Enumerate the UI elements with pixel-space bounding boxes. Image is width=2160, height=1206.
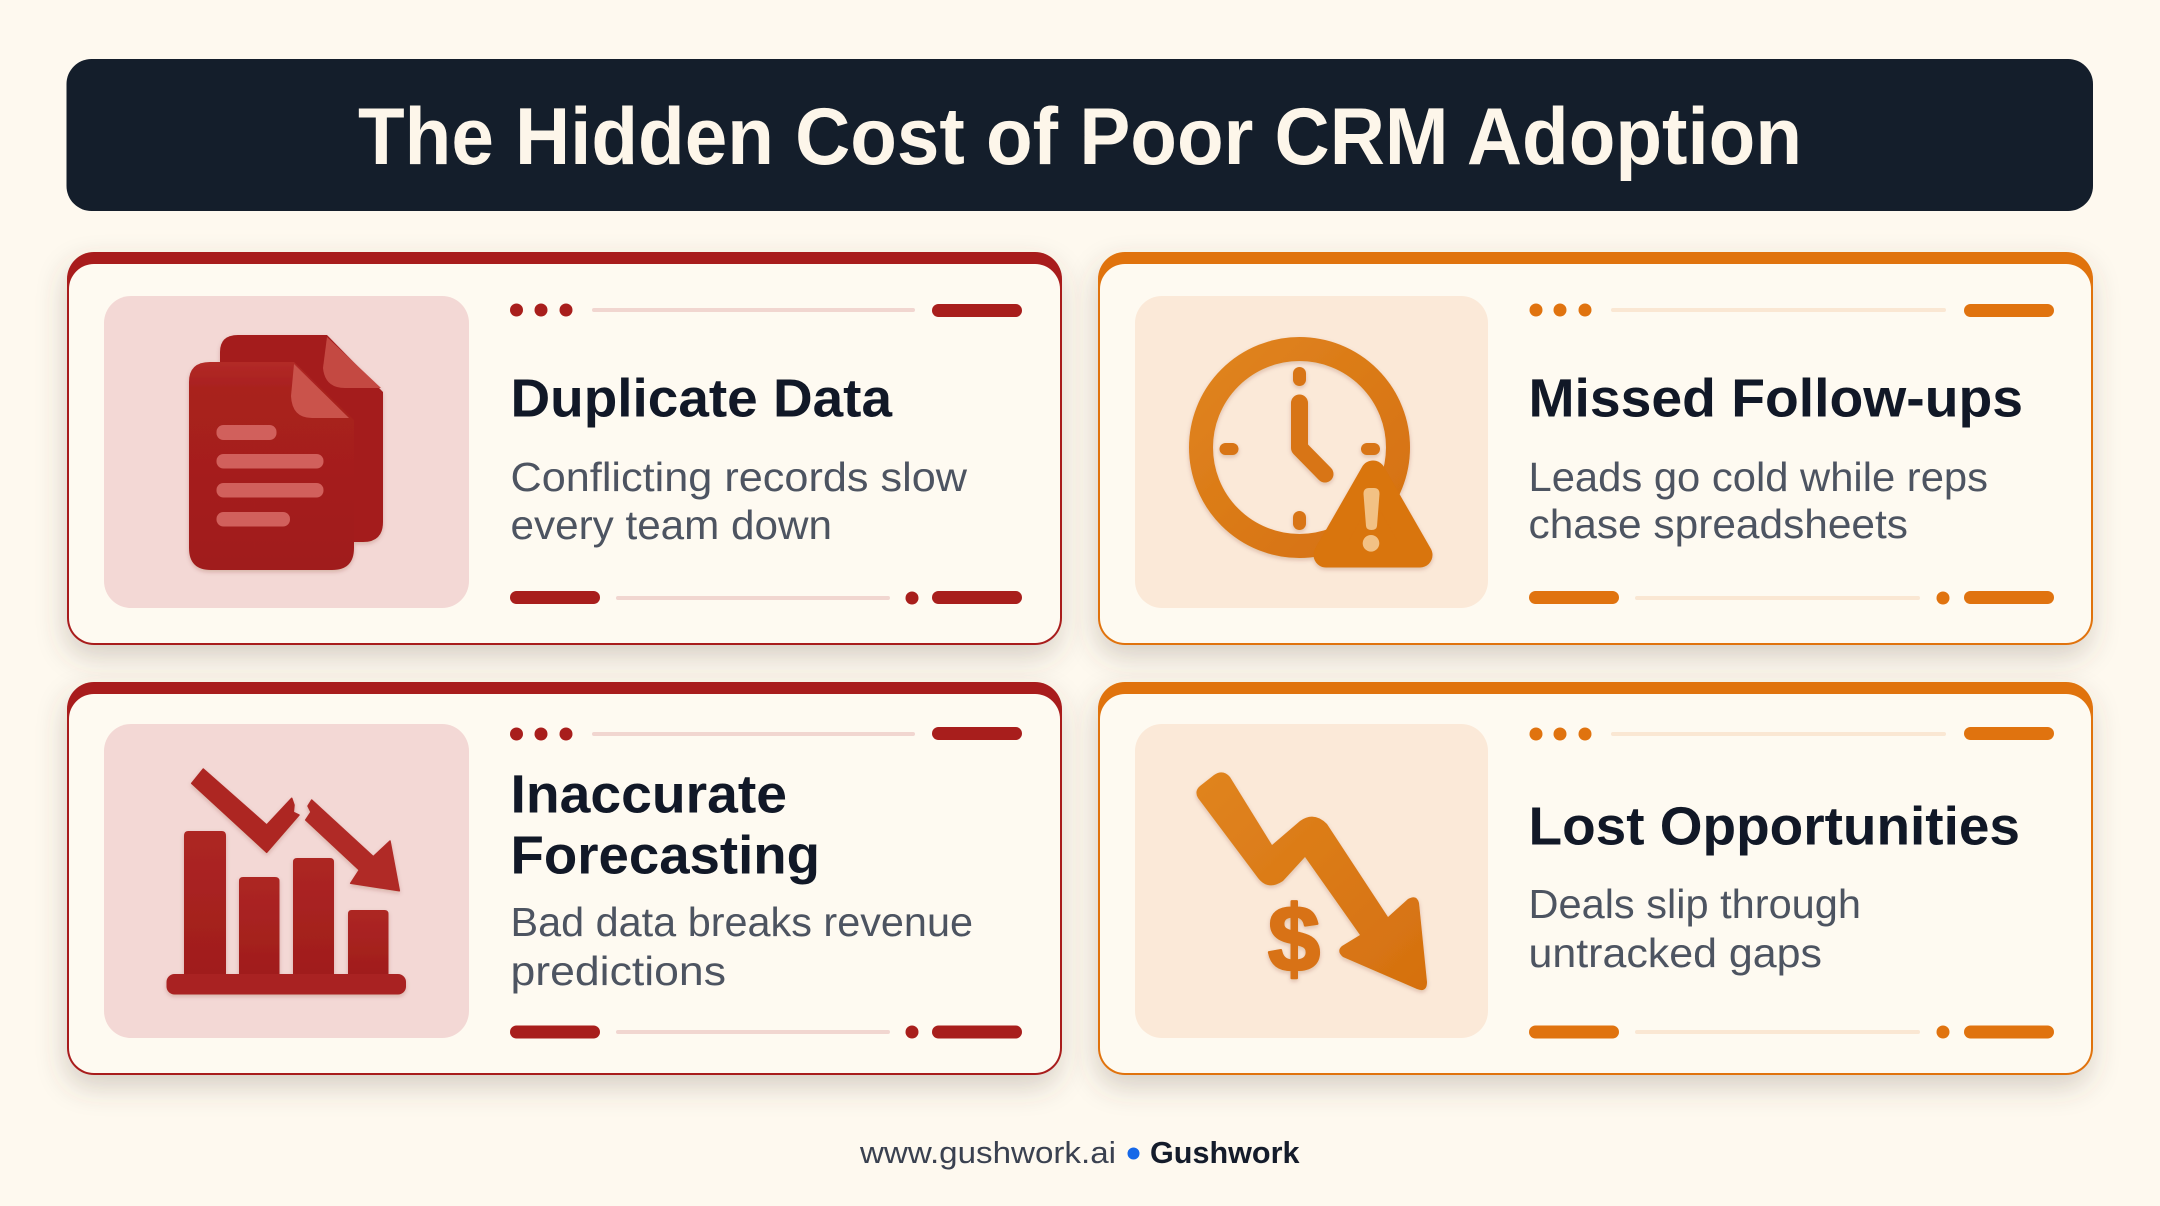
icon: duplicate documents: [189, 335, 383, 570]
heading: Inaccurate: [510, 764, 787, 824]
top ornament: [510, 304, 1022, 317]
description: Conflicting records slow: [510, 454, 967, 500]
icon: falling arrow with dollar: [1196, 772, 1427, 991]
icon: clock with warning: [1201, 349, 1420, 555]
description: every team down: [510, 502, 832, 548]
bottom ornament: [510, 1026, 1022, 1038]
icon tile: [104, 296, 469, 608]
panel: missed follow-ups: [1098, 252, 2093, 645]
icon tile: [1135, 724, 1488, 1038]
panel: duplicate data: [67, 252, 1062, 645]
top ornament: [1530, 727, 2054, 740]
bottom ornament: [510, 591, 1022, 604]
description: chase spreadsheets: [1528, 501, 1908, 547]
heading: [510, 764, 820, 886]
panel: lost opportunities: [1098, 682, 2093, 1075]
heading: Missed Follow-ups: [1528, 368, 2023, 428]
bottom ornament: [1529, 591, 2054, 604]
description: [1528, 881, 1861, 976]
footer: www.gushwork.ai: [859, 1135, 1116, 1170]
description: [1528, 454, 1988, 547]
description: predictions: [510, 948, 726, 994]
description: untracked gaps: [1528, 930, 1822, 976]
title banner: [66, 59, 2093, 211]
footer: [859, 1135, 1300, 1170]
icon tile: [104, 724, 469, 1038]
heading: Duplicate Data: [510, 368, 893, 428]
title: The Hidden Cost of Poor CRM Adoption: [358, 92, 1802, 182]
description: Bad data breaks revenue: [510, 899, 973, 945]
heading: Forecasting: [510, 826, 820, 886]
top ornament: [510, 727, 1022, 740]
icon tile: [1135, 296, 1488, 608]
description: [510, 899, 973, 994]
description: [510, 454, 967, 548]
description: Deals slip through: [1528, 881, 1861, 927]
description: Leads go cold while reps: [1528, 454, 1988, 500]
footer: Gushwork: [1150, 1135, 1300, 1170]
top ornament: [1530, 304, 2054, 317]
heading: Lost Opportunities: [1528, 796, 2020, 856]
dollar sign: $: [1268, 886, 1320, 991]
bottom ornament: [1529, 1026, 2054, 1038]
icon: falling bar chart: [166, 769, 406, 994]
panel: inaccurate forecasting: [67, 682, 1062, 1075]
